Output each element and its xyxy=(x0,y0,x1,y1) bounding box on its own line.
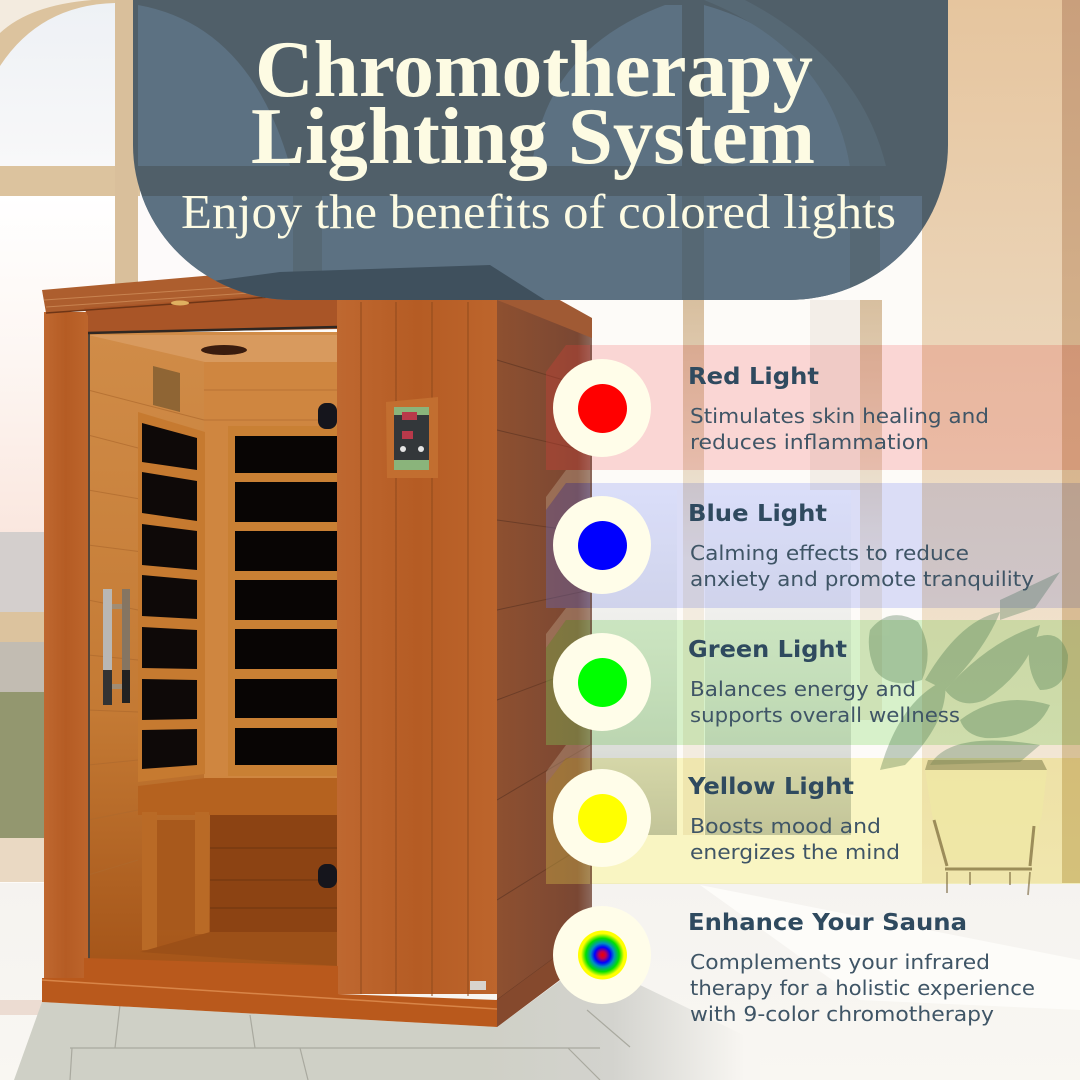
green description: Balances energy and xyxy=(690,677,916,701)
red description xyxy=(690,404,989,454)
control panel xyxy=(386,397,438,478)
panel: red light xyxy=(546,345,1080,470)
yellow description: Boosts mood and xyxy=(690,814,881,838)
bench xyxy=(138,778,338,966)
side wall xyxy=(497,298,592,1027)
panel: yellow light xyxy=(546,758,1080,884)
band gaps on cabin side xyxy=(546,470,590,784)
green description: supports overall wellness xyxy=(690,703,960,727)
title panel: Lighting System xyxy=(251,93,815,181)
enhance heading: Enhance Your Sauna xyxy=(688,908,967,936)
red heading: Red Light xyxy=(688,362,819,390)
heading: Chromotherapy xyxy=(255,26,813,114)
icon: yellow circle xyxy=(553,769,651,867)
blue description xyxy=(690,541,1034,591)
yellow heading: Yellow Light xyxy=(687,772,854,800)
title panel xyxy=(133,0,948,300)
yellow description: energizes the mind xyxy=(690,840,900,864)
icon: rainbow circle xyxy=(553,906,651,1004)
door handle xyxy=(103,589,130,705)
panel: enhance your sauna xyxy=(553,906,1035,1026)
red description: Stimulates skin healing and xyxy=(690,404,989,428)
panel: blue light xyxy=(546,483,1080,608)
back wall heater panels xyxy=(228,426,338,776)
subtitle: Enjoy the benefits of colored lights xyxy=(181,184,896,239)
blue description: anxiety and promote tranquility xyxy=(690,567,1034,591)
panel: green light xyxy=(546,620,1080,745)
door hinges xyxy=(318,403,337,429)
green description xyxy=(690,677,960,727)
warning label xyxy=(153,366,180,412)
enhance description xyxy=(690,950,1035,1026)
floor xyxy=(0,883,1080,1080)
blue description: Calming effects to reduce xyxy=(690,541,969,565)
enhance description: with 9-color chromotherapy xyxy=(690,1002,994,1026)
left door frame xyxy=(44,312,88,978)
crown moulding xyxy=(497,265,592,338)
yellow description xyxy=(690,814,900,864)
left wall heater panels xyxy=(138,412,205,782)
base xyxy=(42,958,497,1027)
icon: green circle xyxy=(553,633,651,731)
sauna cabin xyxy=(42,265,592,1027)
enhance description: Complements your infrared xyxy=(690,950,990,974)
enhance description: therapy for a holistic experience xyxy=(690,976,1035,1000)
door post xyxy=(337,296,497,994)
icon: red circle xyxy=(553,359,651,457)
interior xyxy=(88,332,338,966)
green heading: Green Light xyxy=(688,635,847,663)
blue heading: Blue Light xyxy=(688,499,827,527)
icon: blue circle xyxy=(553,496,651,594)
plant and pot xyxy=(869,572,1068,895)
red description: reduces inflammation xyxy=(690,430,929,454)
